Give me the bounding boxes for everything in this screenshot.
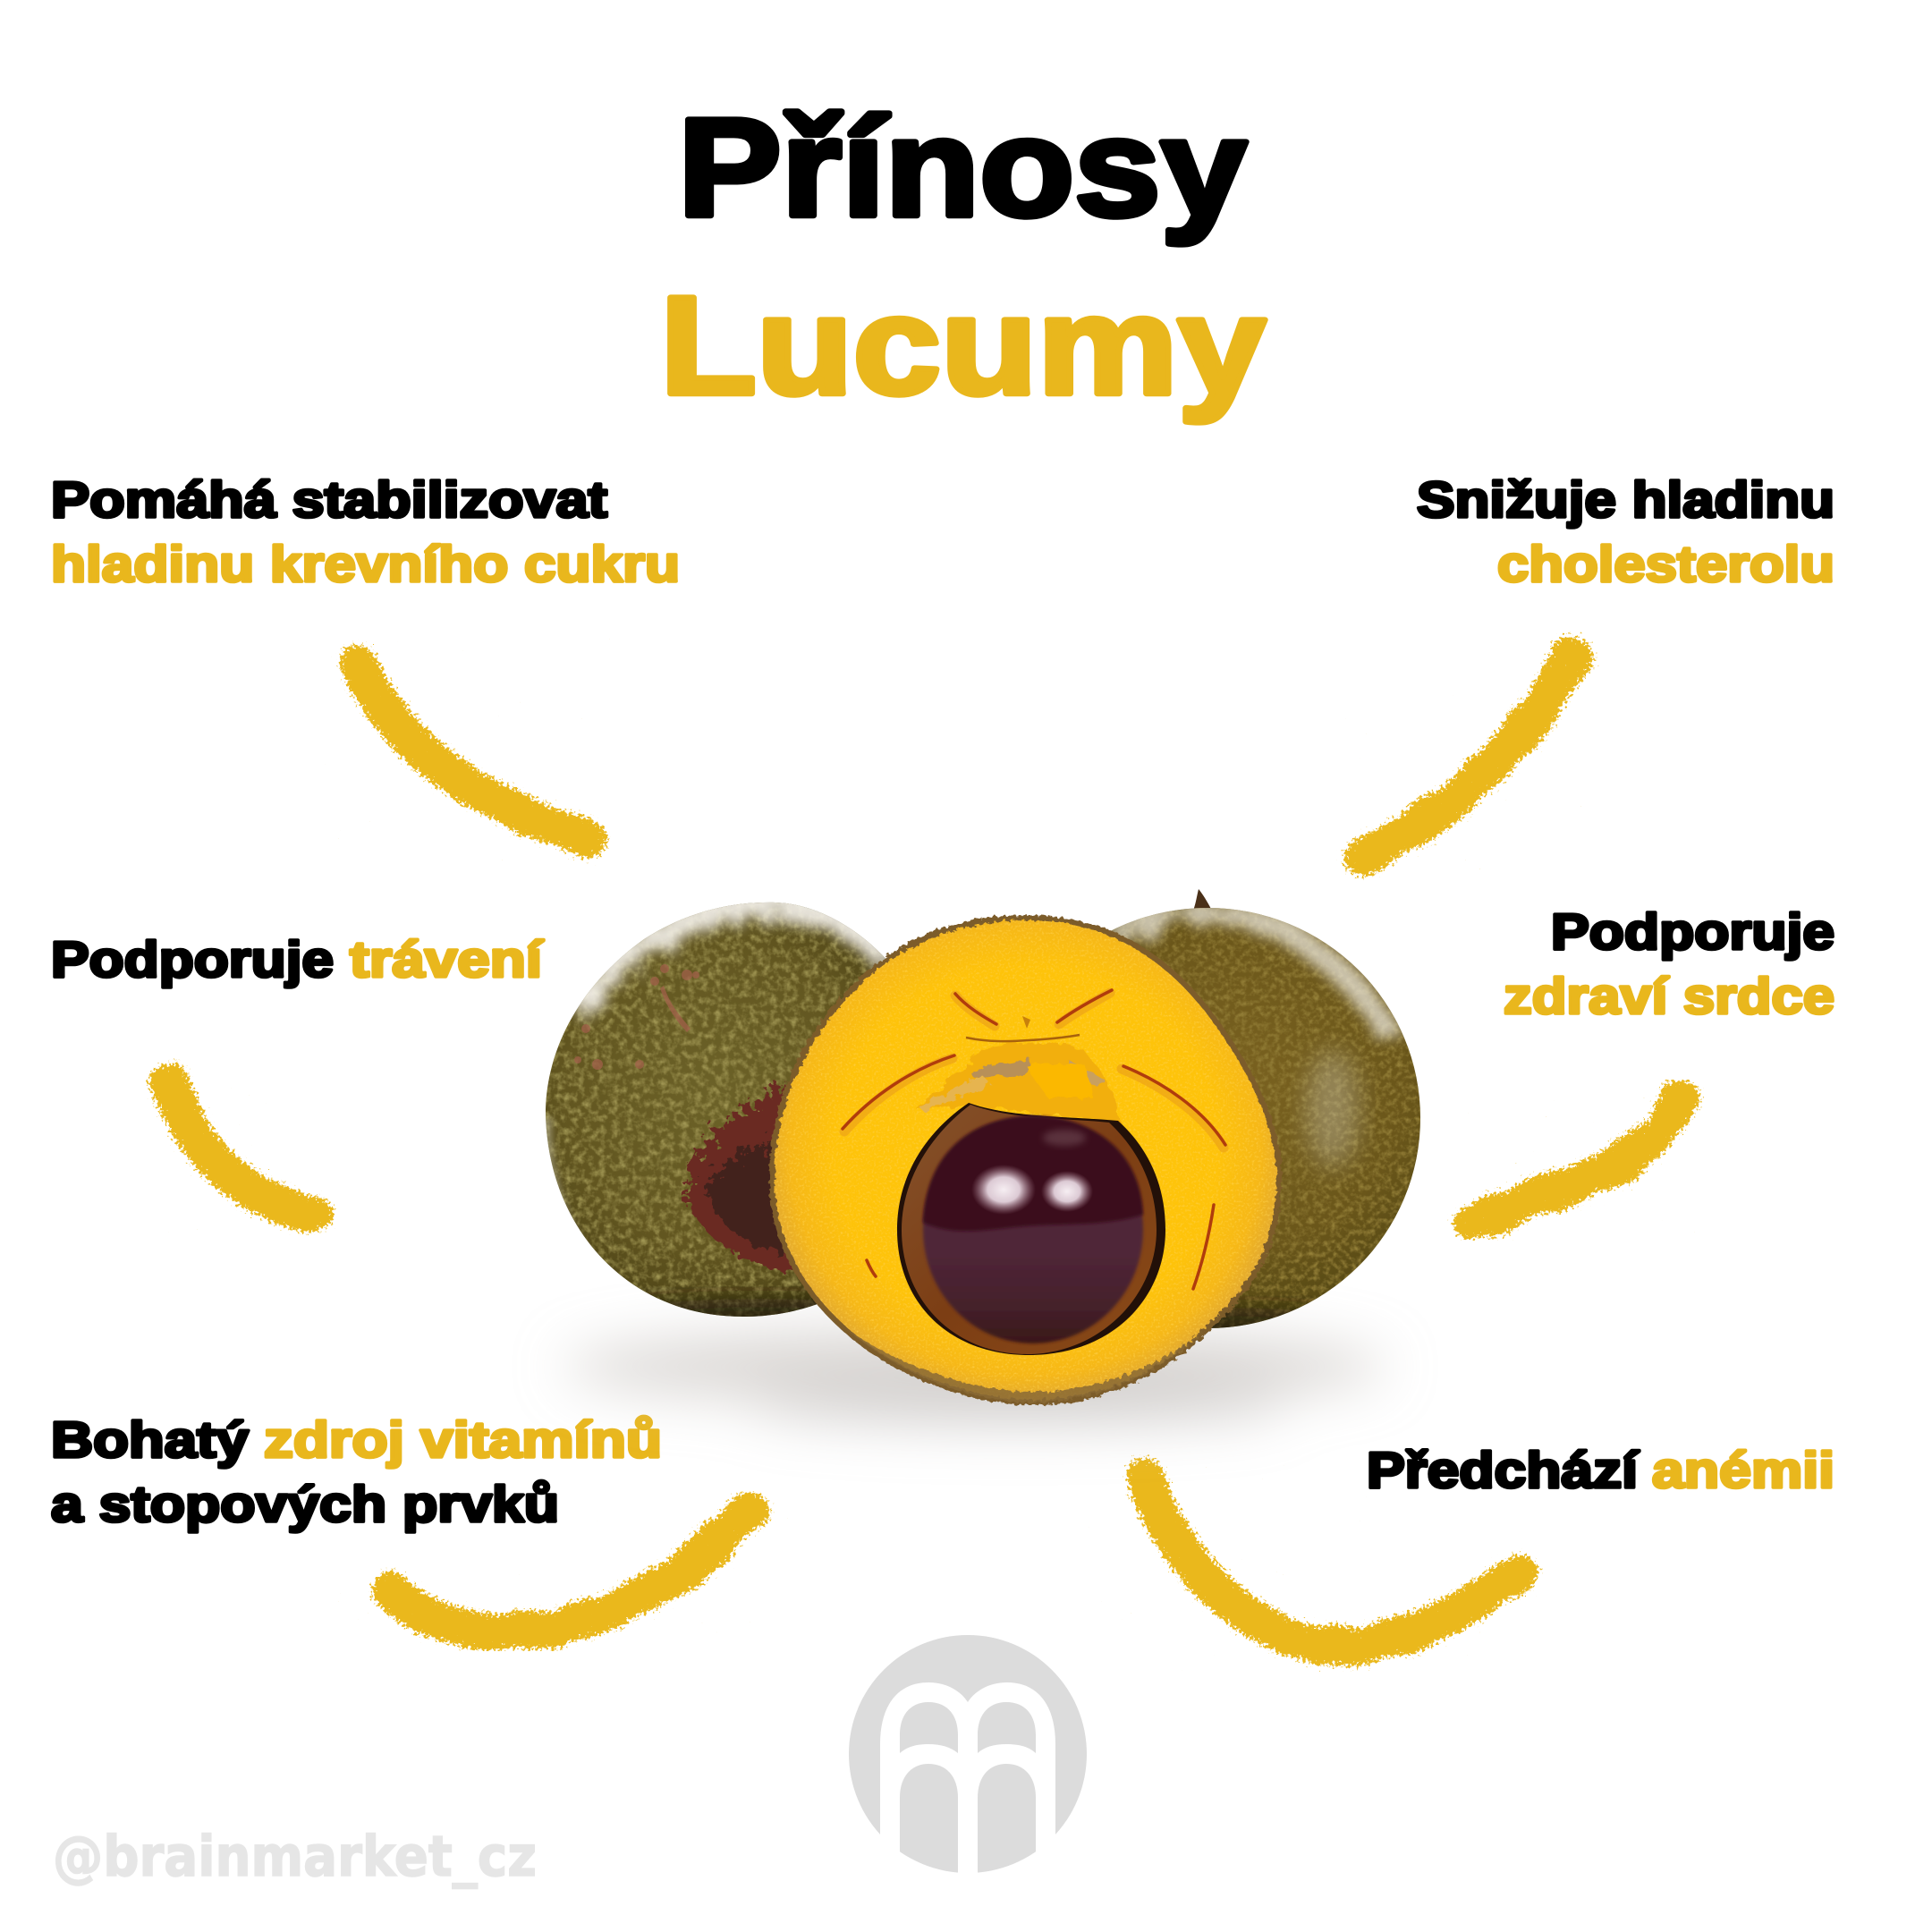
text: blood sugar benefit: Pomáhá stabilizovat [51,471,607,529]
cut fruit flesh [772,918,1279,1402]
text: vitamins benefit: Bohatý [51,1411,249,1469]
text: cholesterol benefit: Snižuje hladinu [1417,471,1835,529]
title: Lucumy [660,268,1266,424]
text: heart benefit [1504,903,1835,1025]
text: blood sugar benefit: hladinu krevního cukru [51,536,680,593]
brush arc: anaemia [1145,1476,1519,1647]
cut fruit rim shade [845,1328,1208,1402]
text: digestion benefit [51,931,544,988]
text: cholesterol benefit: cholesterolu [1497,536,1835,593]
cut fruit brown rim [772,918,1279,1402]
watermark handle: @brainmarket_cz [53,1824,537,1889]
seed highlights [971,1130,1093,1215]
text: vitamins benefit: zdroj vitamínů [264,1411,662,1469]
text: heart benefit: Podporuje [1551,903,1835,961]
right whole fruit [1111,889,1420,1328]
text: cholesterol benefit [1417,471,1835,593]
title: Přínosy [678,90,1247,246]
red cuts in flesh [843,990,1225,1289]
text: vitamins benefit [51,1411,662,1533]
text: blood sugar benefit [51,471,680,593]
text: heart benefit: zdraví srdce [1504,968,1835,1025]
brush arc: blood sugar [358,664,588,839]
seed dark upper half [923,1116,1143,1231]
text: anaemia benefit: anémii [1652,1442,1835,1499]
text: digestion benefit: trávení [350,931,544,988]
brush arc: cholesterol [1361,655,1572,857]
brush arc: vitamins [390,1510,750,1632]
left whole fruit [546,902,886,1317]
text: anaemia benefit [1367,1442,1835,1499]
illustration: lucuma fruit [546,889,1420,1402]
seed cavity [897,1103,1165,1355]
text: anaemia benefit: Předchází [1367,1442,1640,1499]
title [660,90,1266,424]
seed copper rim [902,1105,1157,1354]
seed [923,1116,1143,1343]
torn centre of the flesh [916,1016,1120,1123]
brush arc: digestion [168,1078,315,1215]
text: digestion benefit: Podporuje [51,931,334,988]
logo [849,1635,1087,1887]
ground shadow [564,1327,1386,1424]
text: vitamins benefit: a stopových prvků [51,1476,559,1533]
brush arc: heart [1471,1098,1682,1222]
